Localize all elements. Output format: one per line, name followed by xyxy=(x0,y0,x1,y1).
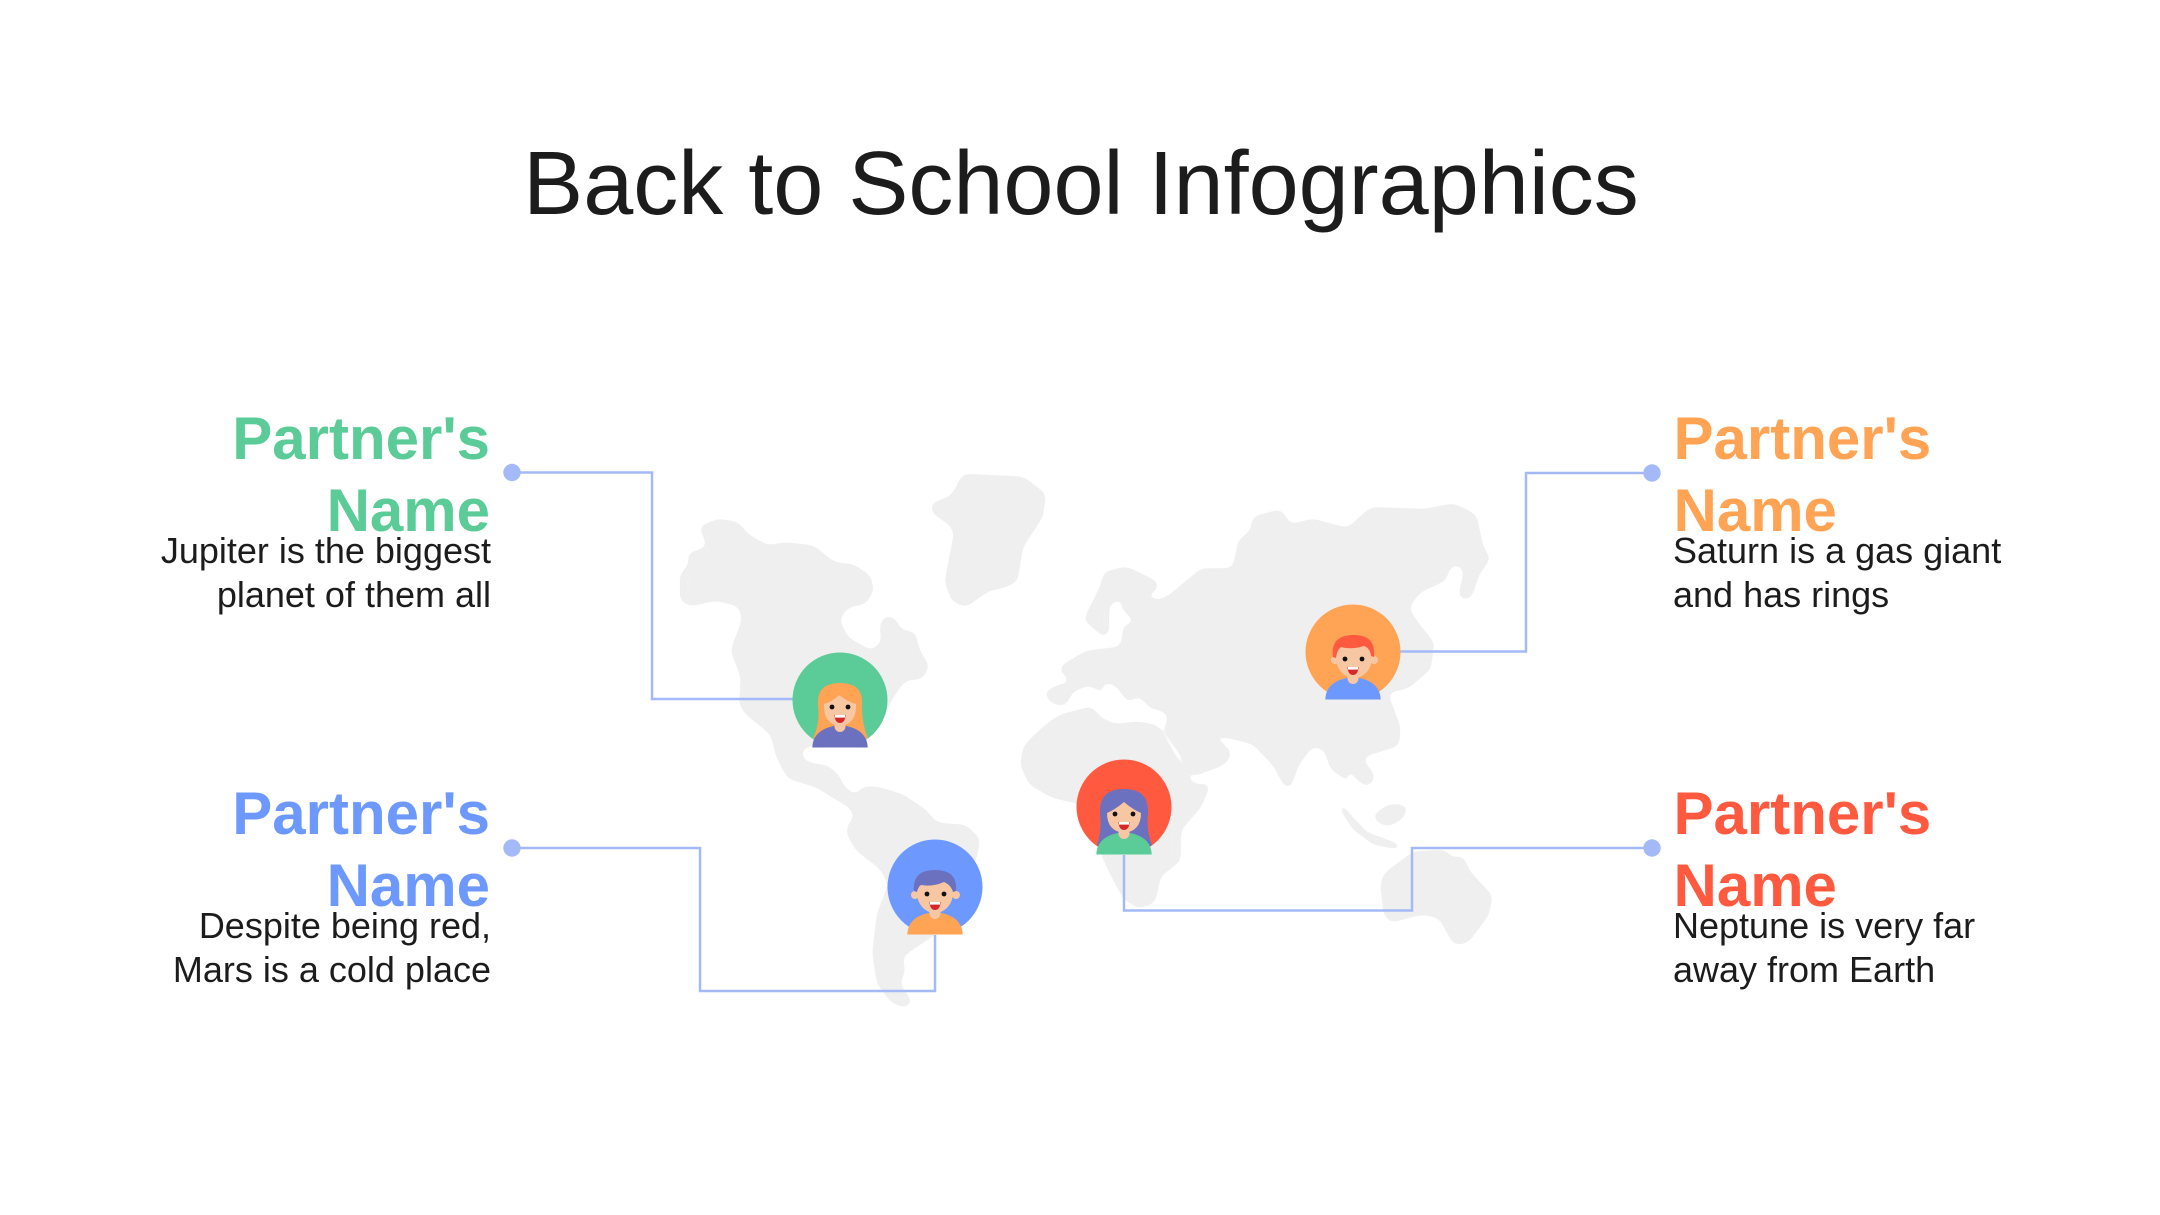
heading: red partner name: Partner's xyxy=(1674,780,1931,847)
avatar: blue circle, purple-haired boy xyxy=(888,840,982,934)
heading: blue partner name: Name xyxy=(327,852,490,919)
panel: orange partner text xyxy=(1673,405,2001,614)
map: Eurasia xyxy=(1043,503,1491,804)
map: Borneo xyxy=(1373,804,1409,827)
text: orange partner description xyxy=(1673,530,2001,614)
connector: orange partner xyxy=(1400,473,1652,652)
heading: orange partner name xyxy=(1674,405,1931,544)
avatar: red circle, purple-haired girl xyxy=(1076,760,1172,854)
connector: red partner xyxy=(1124,848,1652,910)
connector: blue partner xyxy=(512,848,935,991)
text: red partner description: Neptune is very far xyxy=(1673,905,1975,946)
map: Americas xyxy=(680,518,980,1008)
avatar: orange circle, red-haired boy xyxy=(1306,604,1400,700)
text: green partner description xyxy=(161,530,491,614)
text: green partner description: Jupiter is the biggest xyxy=(161,530,491,571)
panel: red partner text xyxy=(1673,780,1975,990)
heading: orange partner name: Name xyxy=(1674,477,1837,544)
text: orange partner description: Saturn is a gas giant xyxy=(1673,530,2001,571)
text: blue partner description: Mars is a cold place xyxy=(173,948,491,990)
text: red partner description xyxy=(1673,905,1975,990)
text: blue partner description xyxy=(173,905,491,990)
map: Greenland xyxy=(931,474,1046,608)
title: Back to School Infographics xyxy=(523,134,1639,234)
heading: blue partner name xyxy=(232,780,490,919)
text: orange partner description: and has rings xyxy=(1673,574,1889,614)
panel: green partner text xyxy=(161,405,491,614)
map: Africa xyxy=(1020,706,1211,909)
heading: blue partner name: Partner's xyxy=(232,780,490,847)
map: Australia xyxy=(1380,849,1493,945)
heading: green partner name: Partner's xyxy=(232,405,490,472)
connector dot: green partner xyxy=(503,464,521,481)
text: green partner description: planet of them all xyxy=(217,574,491,614)
text: blue partner description: Despite being red, xyxy=(199,905,491,946)
heading: green partner name xyxy=(232,405,490,544)
heading: red partner name: Name xyxy=(1674,852,1837,919)
heading: green partner name: Name xyxy=(327,477,490,544)
connector: green partner xyxy=(512,472,793,699)
heading: red partner name xyxy=(1674,780,1931,919)
avatar: green circle, orange-haired girl xyxy=(792,652,888,748)
world map xyxy=(680,474,1493,1008)
heading: orange partner name: Partner's xyxy=(1674,405,1931,472)
map: Indonesia xyxy=(1338,802,1405,850)
panel: blue partner text xyxy=(173,780,491,990)
connector dot: blue partner xyxy=(503,839,521,857)
connector dot: red partner xyxy=(1643,839,1661,857)
text: red partner description: away from Earth xyxy=(1673,948,1935,990)
connector dot: orange partner xyxy=(1643,464,1661,482)
